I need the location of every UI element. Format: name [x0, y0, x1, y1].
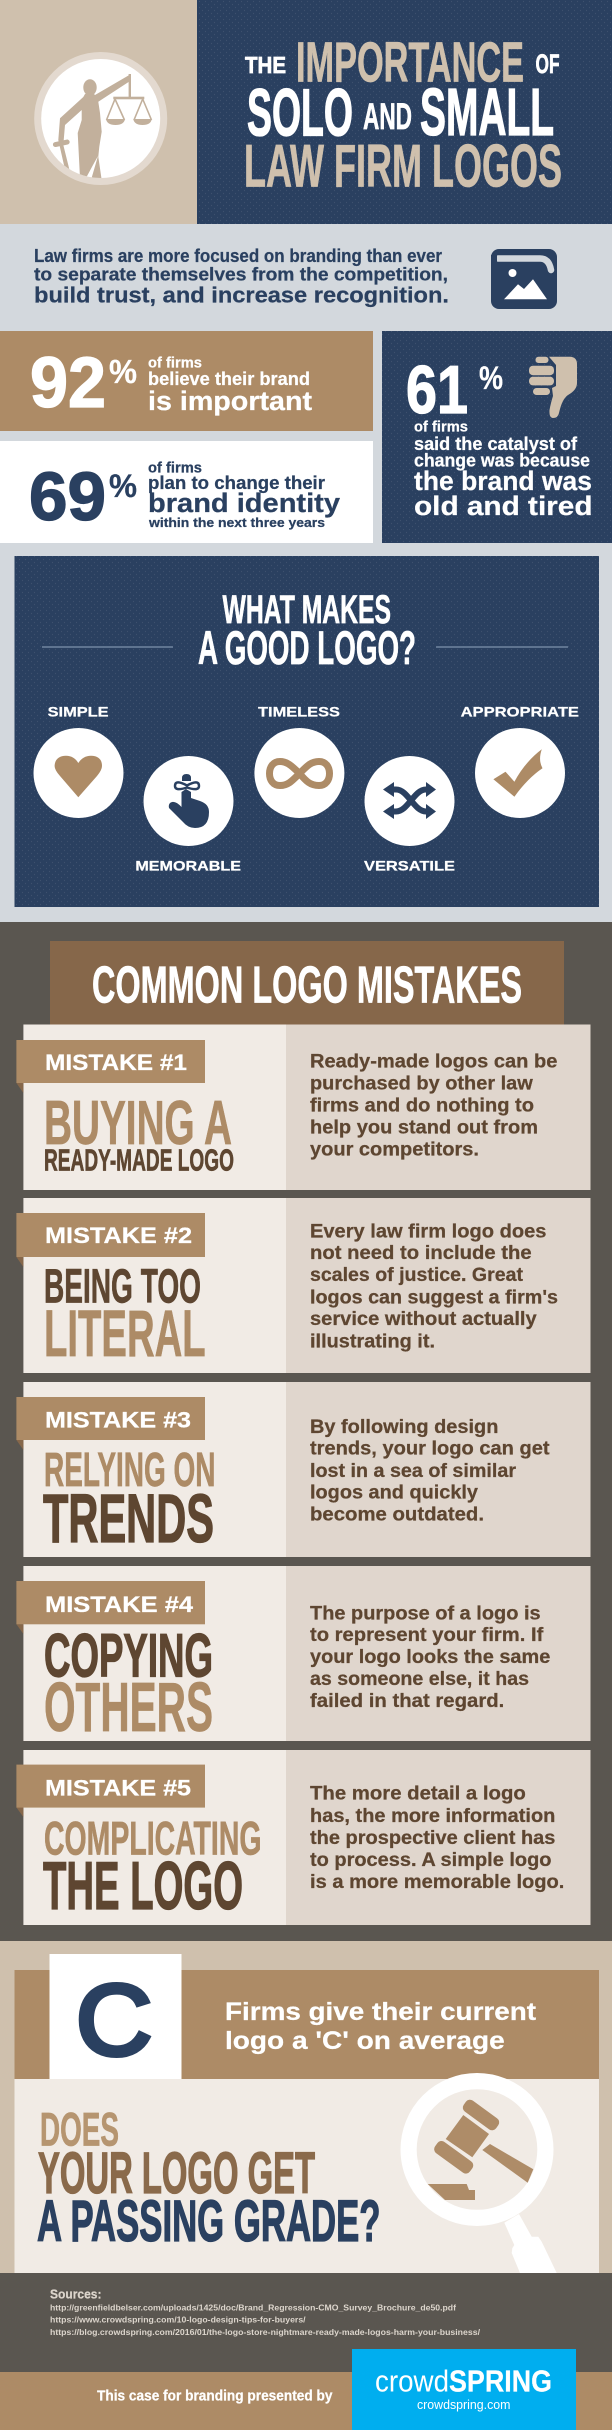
- card: mistake 4: COPYING: [44, 1622, 213, 1690]
- panel: common logo mistakes: [0, 922, 612, 1941]
- text block: grade statement: logo a 'C' on average: [225, 2027, 505, 2055]
- card: mistake 3: By following design: [310, 1417, 498, 1438]
- card: mistake 4: [16, 1566, 590, 1746]
- heading: passing grade: YOUR LOGO GET: [38, 2141, 315, 2206]
- title: OF: [536, 49, 560, 79]
- text block: intro: to separate themselves from the competition,: [34, 265, 448, 285]
- title: [244, 30, 562, 200]
- card: mistake 5: [16, 1750, 590, 1925]
- title: THE: [245, 52, 286, 78]
- panel: sources: Sources:: [50, 2286, 102, 2301]
- card: mistake 5: has, the more information: [310, 1806, 555, 1827]
- panel: 69% stat: %: [109, 468, 137, 504]
- card: mistake 1: BUYING A: [44, 1089, 232, 1158]
- panel: grade: [0, 1941, 612, 2273]
- panel: 92% stat: %: [109, 353, 137, 390]
- panel: 61% stat: change was because: [414, 451, 590, 471]
- icon: picture: [491, 249, 557, 309]
- card: mistake 2: service without actually: [310, 1309, 537, 1330]
- card: mistake 5: MISTAKE #5: [45, 1775, 191, 1800]
- card: mistake 4: OTHERS: [44, 1668, 213, 1746]
- panel: 69% stat: within the next three years: [148, 515, 325, 530]
- card: mistake 5: The more detail a logo: [310, 1784, 526, 1805]
- item: memorable: MEMORABLE: [135, 858, 241, 874]
- card: mistake 1: MISTAKE #1: [45, 1050, 187, 1075]
- card: mistake 5: THE LOGO: [43, 1848, 243, 1924]
- card: mistake 1: help you stand out from: [310, 1118, 538, 1139]
- title: SOLO: [247, 76, 353, 150]
- card: mistake 4: your logo looks the same: [310, 1647, 550, 1668]
- text block: intro: [34, 246, 449, 308]
- card: mistake 2: BEING TOO: [44, 1260, 201, 1314]
- grade card: C: [50, 1954, 182, 2079]
- heading: [50, 941, 564, 1025]
- panel: 92% stat: believe their brand: [148, 369, 310, 389]
- card: mistake 3: lost in a sea of similar: [310, 1461, 517, 1482]
- card: mistake 4: The purpose of a logo is: [310, 1603, 541, 1624]
- text block: intro: Law firms are more focused on branding than ever: [34, 246, 442, 266]
- card: mistake 4: to represent your firm. If: [310, 1625, 544, 1646]
- card: mistake 1: purchased by other law: [310, 1073, 533, 1094]
- text block: intro: build trust, and increase recognition.: [34, 283, 449, 308]
- card: mistake 3: become outdated.: [310, 1504, 484, 1525]
- card: mistake 2: MISTAKE #2: [45, 1223, 192, 1248]
- logo: crowdSPRING: SPRING: [449, 2364, 552, 2398]
- panel: sources: http://greenfieldbelser.com/uploads/1425/doc/Brand_Regression-CMO_Survey_Brochure_de50.pdf: [50, 2303, 456, 2313]
- panel: 92% stat: 92: [30, 344, 106, 423]
- panel: 61% stat: [382, 331, 612, 543]
- panel: 61% stat: the brand was: [414, 466, 592, 496]
- panel: 61% stat: 61: [406, 352, 468, 428]
- panel: 69% stat: brand identity: [148, 488, 340, 518]
- panel: 61% stat: of firms: [414, 419, 468, 436]
- text block: grade statement: [225, 1998, 537, 2055]
- card: mistake 5: to process. A simple logo: [310, 1850, 552, 1871]
- item: versatile: VERSATILE: [364, 858, 455, 874]
- panel: 61% stat: old and tired: [414, 491, 592, 521]
- heading: [198, 588, 416, 674]
- card: mistake 1: your competitors.: [310, 1140, 479, 1161]
- card: mistake 4: MISTAKE #4: [45, 1592, 194, 1617]
- panel: 69% stat: [0, 441, 373, 543]
- card: mistake 2: LITERAL: [44, 1296, 206, 1370]
- card: mistake 2: scales of justice. Great: [310, 1265, 524, 1286]
- card: mistake 1: Ready-made logos can be: [310, 1052, 557, 1073]
- footer: presented by: This case for branding presented by: [97, 2388, 333, 2405]
- panel: sources: https://blog.crowdspring.com/2016/01/the-logo-store-nightmare-ready-made-logos-harm-your-business/: [50, 2327, 481, 2337]
- item: versatile: [364, 756, 455, 874]
- card: mistake 2: logos can suggest a firm's: [310, 1287, 558, 1308]
- logo: crowdSPRING: [352, 2349, 576, 2430]
- heading: WHAT MAKES: [222, 588, 391, 632]
- panel: header: [0, 0, 612, 224]
- item: simple: [34, 704, 124, 818]
- panel: 69% stat: 69: [29, 458, 106, 535]
- card: mistake 2: [16, 1198, 590, 1373]
- card: mistake 3: logos and quickly: [310, 1483, 478, 1504]
- item: appropriate: APPROPRIATE: [461, 704, 579, 720]
- panel: sources: https://www.crowdspring.com/10-logo-design-tips-for-buyers/: [50, 2315, 306, 2325]
- panel: 69% stat: plan to change their: [148, 473, 325, 493]
- card: mistake 3: TRENDS: [43, 1480, 214, 1557]
- icon: thumbs down: [529, 357, 577, 418]
- card: mistake 4: as someone else, it has: [310, 1669, 529, 1690]
- title: AND: [363, 96, 412, 137]
- card: mistake 3: MISTAKE #3: [45, 1408, 191, 1432]
- panel: sources: [0, 2273, 612, 2372]
- footer: presented by: [0, 2349, 612, 2430]
- card: mistake 2: Every law firm logo does: [310, 1221, 546, 1242]
- grade card: C: C: [76, 1964, 152, 2076]
- heading: passing grade: A PASSING GRADE?: [37, 2189, 380, 2254]
- text block: grade statement: Firms give their current: [225, 1998, 537, 2026]
- panel: 92% stat: is important: [148, 386, 312, 416]
- item: simple: SIMPLE: [48, 704, 109, 720]
- card: mistake 1: [16, 1024, 590, 1190]
- card: mistake 5: the prospective client has: [310, 1828, 555, 1849]
- card: mistake 3: [16, 1382, 590, 1557]
- card: mistake 2: not need to include the: [310, 1243, 532, 1264]
- item: memorable: [135, 756, 241, 874]
- card: mistake 3: RELYING ON: [44, 1444, 216, 1497]
- card: mistake 5: COMPLICATING: [44, 1812, 262, 1864]
- card: mistake 4: failed in that regard.: [310, 1691, 504, 1712]
- panel: 92% stat: [0, 331, 373, 431]
- panel: 69% stat: of firms: [148, 460, 202, 477]
- panel: 61% stat: said the catalyst of: [414, 434, 578, 454]
- icon: magnifier and gavel: [409, 2081, 557, 2273]
- card: mistake 1: READY-MADE LOGO: [44, 1142, 234, 1178]
- icon: lady justice emblem: [34, 52, 167, 185]
- panel: 92% stat: of firms: [148, 355, 202, 372]
- logo: crowdSPRING: crowdspring.com: [417, 2397, 510, 2412]
- card: mistake 3: trends, your logo can get: [310, 1439, 550, 1460]
- panel: what makes a good logo: [14, 556, 599, 907]
- card: mistake 5: is a more memorable logo.: [310, 1872, 564, 1893]
- card: mistake 1: firms and do nothing to: [310, 1096, 534, 1117]
- heading: passing grade: DOES: [40, 2102, 119, 2156]
- item: timeless: TIMELESS: [258, 704, 340, 720]
- panel: 61% stat: %: [479, 360, 503, 396]
- logo: crowdSPRING: crowd: [375, 2364, 449, 2398]
- item: timeless: [254, 704, 344, 818]
- heading: passing grade: [37, 2102, 380, 2254]
- item: appropriate: [461, 704, 579, 818]
- card: mistake 2: illustrating it.: [310, 1331, 435, 1352]
- heading: A GOOD LOGO?: [198, 621, 416, 674]
